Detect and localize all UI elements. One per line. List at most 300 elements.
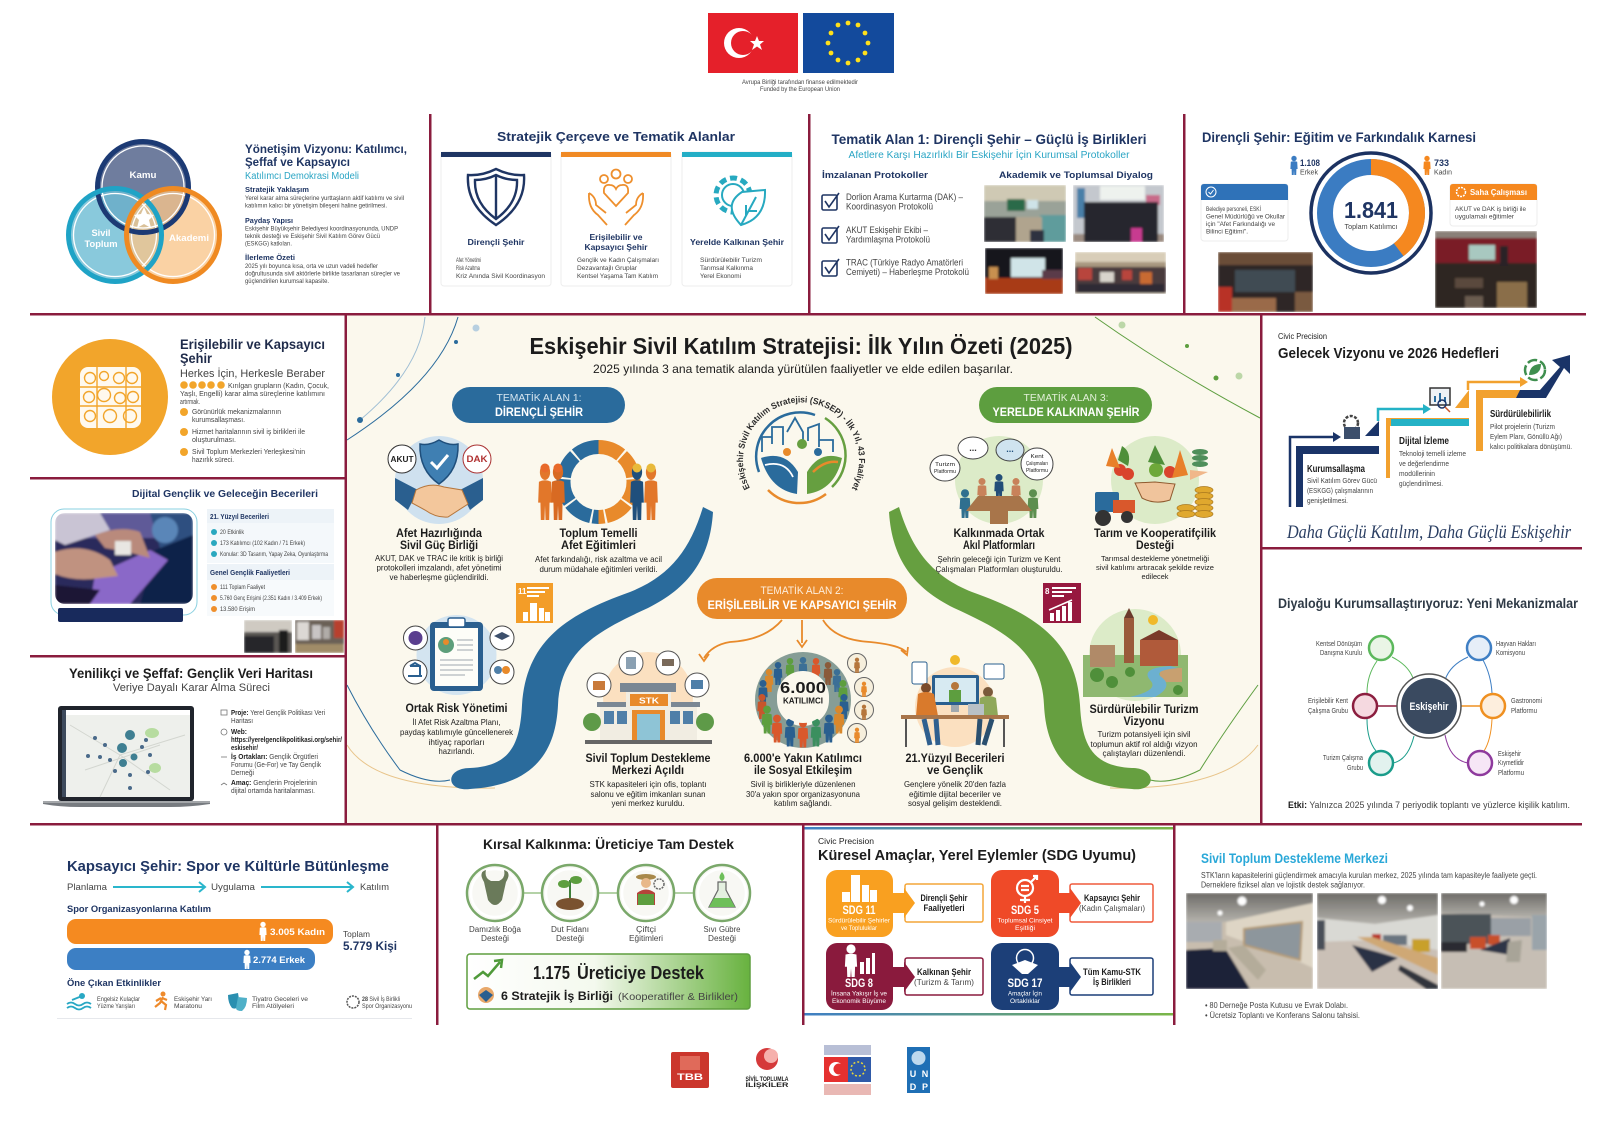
SDG 5 row [991, 870, 1153, 937]
governance text: (ESKGG) katkıları. [245, 240, 292, 248]
venn diagram: Sivil [92, 228, 110, 239]
pill: theme 2: ERİŞİLEBİLİR VE KAPSAYICI ŞEHİR [708, 597, 897, 612]
icon: gear and leaf [716, 178, 765, 225]
icon: STK building: STK [639, 696, 660, 706]
step texts: Sivil Katılım Görev Gücü [1307, 476, 1377, 485]
thematic subtitle: Afetlere Karşı Hazırlıklı Bir Eskişehir İçin Kurumsal Protokoller [848, 148, 1130, 161]
item: sustainable tourism: çalıştayları düzenlendi. [1102, 748, 1186, 758]
arrow band: green [889, 507, 1151, 789]
support circles: Dut Fidanı [551, 925, 589, 934]
governance text: doğrultusunda sivil aktörlerle birlikte tasarlanan süreçler ve [245, 270, 401, 278]
panel: youth data map [43, 666, 342, 807]
female stat [1423, 156, 1452, 176]
male stat: 1.108 [1300, 158, 1320, 168]
icon: partnership [478, 987, 494, 1003]
pill: theme 3 [979, 387, 1152, 423]
icon: gear building [1344, 416, 1360, 439]
hub labels: Grubu [1347, 763, 1363, 772]
governance heading [245, 142, 407, 182]
accessible text: Hizmet haritalarının sivil iş birlikleri ile [192, 429, 305, 436]
step texts: modüllerinin [1399, 469, 1435, 478]
hub labels: Kentsel Dönüşüm [1316, 639, 1362, 648]
producer support box: 1.175 [533, 963, 570, 983]
blue card: için "Afet Farkındalığı ve [1206, 221, 1275, 228]
card: accessible city [561, 152, 671, 286]
item: social engagement: Sivil iş birlikleriyle düzenlenen [750, 779, 856, 789]
highlights: Spor Organizasyonu [362, 1003, 412, 1010]
hub labels: Hayvan Hakları [1496, 639, 1536, 648]
item: disaster alliance: protokolleri imzalandı, afet yönetimi [376, 562, 502, 572]
thematic heading: Tematik Alan 1: Dirençli Şehir – Güçlü İş Birlikleri [832, 131, 1146, 147]
protocol list: AKUT Eskişehir Ekibi – [846, 225, 928, 235]
blue card: Bilinci Eğitimi". [1206, 228, 1248, 236]
item: disaster alliance: ve haberleşme güçlendirildi. [390, 572, 488, 582]
skills table: 111 Toplam Faaliyet [220, 585, 265, 591]
map text: Forumu (Ge-For) ve Tay Gençlik [231, 762, 321, 769]
pill: theme 3: YERELDE KALKINAN ŞEHİR [992, 406, 1140, 419]
support circles: Desteği [556, 934, 584, 943]
step texts: Pilot projelerin (Turizm [1490, 422, 1555, 431]
total stat [343, 929, 397, 953]
highlights heading: Öne Çıkan Etkinlikler [67, 978, 162, 988]
centre heading: Sivil Toplum Destekleme Merkezi [1201, 850, 1388, 866]
male stat: Erkek [1300, 170, 1318, 176]
blue card: Belediye personeli, ESKİ [1206, 204, 1261, 213]
panel: SDG alignment [804, 827, 1173, 1016]
photo: mailbox room [1186, 893, 1313, 989]
item: 21st century skills: eğitimle dijital beceriler ve [909, 789, 1001, 799]
funding note: Avrupa Birliği tarafından finanse edilmektedir [742, 80, 858, 86]
support circles: Desteği [481, 934, 509, 943]
icon: meeting table: Platformu [1026, 468, 1048, 474]
card: local development: Yerelde Kalkınan Şehir [690, 237, 785, 247]
orange card: AKUT ve DAK iş birliği ile [1455, 206, 1526, 213]
step texts: Dijital İzleme [1399, 434, 1449, 447]
item: social engagement: ile Sosyal Etkileşim [754, 763, 852, 777]
item: social engagement [744, 654, 874, 808]
item: support centre: yeni merkez kuruldu. [612, 798, 684, 808]
accessible text: artırmak. [180, 399, 200, 406]
governance text: Paydaş Yapısı [245, 216, 293, 225]
bar chart [67, 919, 333, 970]
step texts: ve değerlendirme [1399, 459, 1449, 468]
producer support box: Üreticiye Destek [577, 963, 705, 983]
logo: TBB [671, 1052, 709, 1088]
support circles: Sıvı Gübre [704, 925, 741, 934]
icon: flask [709, 872, 735, 907]
icon: community circle [52, 339, 168, 455]
icon: STK building [583, 651, 714, 744]
item: social engagement: katılım sağlandı. [774, 798, 832, 808]
support circles [467, 865, 750, 943]
total stat: 5.779 Kişi [343, 939, 397, 953]
Turkish flag [708, 13, 798, 73]
SDG 8 row [826, 943, 983, 1010]
hub labels: Platformu [1498, 768, 1524, 777]
card: accessible city: Kentsel Yaşama Tam Katılım [577, 273, 658, 280]
card: local development: Sürdürülebilir Turizm [700, 257, 762, 264]
icon: seedling [556, 876, 584, 910]
support circles: Eğitimleri [629, 934, 663, 943]
donut chart: Toplam Katılımcı [1344, 222, 1398, 231]
icon: shield [468, 169, 524, 225]
protocols heading: İmzalanan Protokoller [822, 170, 928, 181]
pill: theme 1: TEMATİK ALAN 1: [496, 391, 582, 404]
panel: thematic area 1 [822, 131, 1166, 294]
dialogue heading: Akademik ve Toplumsal Diyalog [999, 170, 1153, 181]
icon: handshake shield [388, 436, 491, 524]
staircase graphic [1290, 355, 1570, 507]
governance text: Eskişehir Büyükşehir Belediyesi koordinasyonunda, UNDP [245, 226, 398, 232]
SDG label: Civic Precision [818, 837, 874, 846]
logo: UNDP: U [910, 1069, 916, 1079]
item: 21st century skills: sosyal gelişim desteklendi. [908, 798, 1002, 808]
frame and navy bar [51, 509, 197, 622]
SDG 11 row: ve Topluluklar [841, 925, 878, 932]
bar chart: 3.005 Kadın [270, 927, 325, 938]
laptop with map [43, 706, 210, 807]
highlights: Eskişehir Yarı [174, 996, 212, 1003]
arrow band: blue [451, 507, 713, 789]
item: social engagement: 30'a yakın spor organizasyonuna [746, 789, 860, 799]
card: local development: Yerel Ekonomi [700, 273, 741, 280]
step texts: Sürdürülebilirlik [1490, 409, 1551, 420]
orange card [1450, 184, 1537, 226]
main title: Eskişehir Sivil Katılım Stratejisi: İlk Yılın Özeti (2025) [530, 333, 1072, 359]
item: community training [535, 447, 662, 574]
item: disaster alliance: Sivil Güç Birliği [400, 538, 478, 552]
centre bullets [1205, 1001, 1360, 1020]
total stat: Toplam [343, 929, 370, 939]
centre bullets: • 80 Derneğe Posta Kutusu ve Evrak Dolabı. [1205, 1001, 1348, 1010]
accessible heading: Erişilebilir ve Kapsayıcı [180, 337, 325, 352]
photo: auditorium [1218, 252, 1313, 312]
map heading: Yenilikçi ve Şeffaf: Gençlik Veri Haritası [69, 666, 313, 681]
producer support box: 6 Stratejik İş Birliği [501, 988, 613, 1003]
photo: stage [985, 248, 1063, 294]
step texts: kalıcı politikalara dönüşümü. [1490, 442, 1572, 451]
vision heading: Gelecek Vizyonu ve 2026 Hedefleri [1278, 345, 1499, 362]
accessible text: Kırılgan grupların (Kadın, Çocuk, [228, 383, 329, 390]
map text: eskisehir/ [231, 745, 258, 752]
map text: Derneği [231, 770, 254, 777]
pill: theme 2: TEMATİK ALAN 2: [760, 584, 844, 597]
orange card: Saha Çalışması [1470, 188, 1527, 197]
icon: meeting table: Turizm [935, 462, 955, 468]
item: 21st century skills: ve Gençlik [927, 763, 983, 777]
logo: Turkey EU [824, 1045, 871, 1095]
skills table: Konular: 3D Tasarım, Yapay Zeka, Oyunlaştırma [220, 552, 329, 558]
accessible text: Yaşlı, Engelli) karar alma süreçlerine katılımını [180, 391, 325, 398]
map text: Haritası [231, 718, 253, 725]
icon: handshake shield: DAK [466, 454, 488, 464]
icon: farm support [1095, 436, 1213, 526]
photo: workshop 1 [244, 620, 292, 653]
logo: civil society relations [746, 1048, 789, 1089]
icon: hands and heart [589, 170, 643, 225]
icon: meeting table: ... [969, 443, 977, 453]
SDG 8 badge: 8 [1045, 587, 1050, 596]
map text [221, 710, 342, 795]
bar chart: 2.774 Erkek [253, 955, 306, 966]
hub labels: Çalışma Grubu [1308, 706, 1348, 715]
item: joint risk management: İl Afet Risk Azaltma Planı, [412, 717, 500, 727]
skills table: 13.580 Erişim [220, 607, 255, 613]
SDG 11 row: SDG 11 [842, 903, 876, 917]
logo: UNDP: P [922, 1082, 928, 1092]
governance text: İlerleme Özeti [245, 253, 295, 262]
logo: civil society relations: SİVİL TOPLUMLA [746, 1076, 789, 1083]
highlights [57, 992, 412, 1019]
vision label: Civic Precision [1278, 332, 1327, 341]
item: 21st century skills: Gençlere yönelik 20'den fazla [904, 779, 1006, 789]
map text: Amaç: Gençlerin Projelerinin [231, 780, 317, 787]
donut chart [1311, 153, 1431, 273]
SDG 8 row: SDG 8 [845, 976, 873, 990]
step texts: Eylem Planı, Gönüllü Ağı) [1490, 432, 1562, 441]
item: common mind platforms: Akıl Platformları [963, 538, 1035, 552]
item: joint risk management: ihtiyaç raporları [428, 737, 484, 747]
blue card: Genel Müdürlüğü ve Okullar [1206, 214, 1286, 220]
item: agriculture: sivil katılımı artıracak şekilde revize [1096, 563, 1214, 572]
governance heading: Yönetişim Vizyonu: Katılımcı, [245, 142, 407, 156]
governance text: katılımın kalıcı bir yönetişim bileşeni haline getirilmesi. [245, 202, 387, 210]
governance text: 2025 yılı boyunca kısa, orta ve uzun vadeli hedefler [245, 263, 378, 270]
card: resilient city: Kriz Anında Sivil Koordinasyon [456, 273, 545, 280]
item: community training: durum müdahale eğitimleri verildi. [540, 564, 658, 574]
icon: meeting table [930, 436, 1053, 524]
photo: classroom [984, 185, 1066, 242]
map text: Proje: Yerel Gençlik Politikası Veri [231, 710, 325, 717]
decorative dots [357, 322, 1242, 423]
sport heading: Kapsayıcı Şehir: Spor ve Kültürle Bütünleşme [67, 858, 389, 875]
highlights: Maratonu [174, 1003, 202, 1010]
venn diagram: Kamu [130, 170, 157, 181]
panel: strategic framework [441, 129, 792, 286]
panel: future vision 2026 [1278, 332, 1572, 543]
item: community training: Afet Eğitimleri [561, 538, 636, 552]
protocol list: Yardımlaşma Protokolü [846, 234, 930, 244]
card: resilient city: Risk Azaltma [456, 265, 480, 272]
item: 21st century skills: 21.Yüzyıl Becerileri [906, 751, 1004, 765]
icon: city and river [1083, 608, 1188, 701]
item: community training: Toplum Temelli [560, 526, 638, 540]
photo: laptop hands [55, 513, 193, 604]
panel: digital youth [51, 488, 344, 653]
SDG 5 row: Eşitliği [1015, 925, 1035, 932]
panel: sport and culture [57, 858, 412, 1019]
map text: https://yerelgenclikpolitikasi.org/sehir/ [231, 737, 342, 744]
map subtitle: Veriye Dayalı Karar Alma Süreci [113, 682, 270, 694]
card: local development [682, 152, 792, 286]
panel: central strategy summary [347, 316, 1260, 808]
pill: theme 1: DİRENÇLİ ŞEHİR [495, 406, 584, 419]
card: resilient city: Dirençli Şehir [468, 237, 525, 247]
card: accessible city: Kapsayıcı Şehir [584, 242, 648, 252]
process arrows: Katılım [360, 882, 389, 893]
hub labels: Eskişehir [1498, 749, 1521, 758]
highlights: Tiyatro Geceleri ve [252, 996, 308, 1003]
highlights: Film Atölyeleri [252, 1003, 294, 1010]
icon: meeting table: Çalışmaları [1026, 461, 1048, 467]
photo: crowd [1075, 252, 1166, 294]
item: support centre [583, 651, 714, 808]
pill: theme 2 [697, 578, 907, 619]
hub labels: Erişilebilir Kent [1308, 696, 1348, 705]
icon: clipboard [403, 615, 514, 695]
item: agriculture: edilecek [1142, 572, 1169, 581]
step texts: güçlendirilmesi. [1399, 479, 1443, 488]
rural heading: Kırsal Kalkınma: Üreticiye Tam Destek [483, 837, 735, 852]
SDG 17 row: Ortaklıklar [1010, 998, 1041, 1005]
photo: workshop 2 [295, 620, 344, 653]
protocol list: Cemiyeti) – Haberleşme Protokolü [846, 267, 969, 277]
item: agriculture [1094, 436, 1216, 581]
item: sustainable tourism: Turizm potansiyeli için sivil [1098, 729, 1191, 739]
highlights: 28 Sivil İş Birlikli [362, 994, 400, 1003]
support circles: Damızlık Boğa [469, 925, 522, 934]
item: social engagement: 6.000'e Yakın Katılımcı [744, 751, 862, 765]
protocol list: Koordinasyon Protokolü [846, 202, 933, 212]
skills table: 5.760 Genç Erişimi (2.351 Kadın / 3.409 Erkek) [220, 596, 322, 602]
process arrows: Uygulama [211, 882, 256, 893]
SDG 8 badge [1043, 583, 1081, 623]
item: joint risk management: hazırlandı. [438, 746, 474, 756]
item: common mind platforms: Şehrin geleceği için Turizm ve Kent [938, 554, 1061, 564]
hub labels: Danışma Kurulu [1320, 648, 1362, 657]
EU flag [803, 13, 894, 73]
accessible text [180, 383, 329, 464]
item: support centre: salonu ve eğitim imkanları sunan [590, 789, 706, 799]
protocol list: TRAC (Türkiye Radyo Amatörleri [846, 258, 963, 268]
governance text: Stratejik Yaklaşım [245, 185, 309, 194]
icon: crowd ring: 6.000 [780, 680, 826, 697]
SDG 8 row: (Turizm & Tarım) [914, 977, 974, 987]
icon: meeting table: Kent [1030, 454, 1044, 460]
card: accessible city: Gençlik ve Kadın Çalışmaları [577, 257, 659, 264]
icon: crowd ring [757, 654, 874, 748]
accessible text: kurumsallaşması. [192, 417, 245, 424]
SDG 17 row: İş Birlikleri [1093, 977, 1131, 987]
skills table: 20 Etkinlik [220, 530, 245, 536]
SDG 17 row: Amaçlar İçin [1008, 988, 1042, 998]
icon: recycle leaf [1525, 360, 1545, 380]
support circles: Çiftçi [636, 925, 656, 934]
centre description: STK'ların kapasitelerini güçlendirmek amacıyla kurulan merkez, 2025 yılında tam kapasiteyle faaliyete geçti. [1201, 871, 1537, 880]
icon: chart magnifier [1430, 388, 1450, 412]
item: sustainable tourism [1083, 608, 1198, 758]
accessible bullet dots [180, 381, 225, 456]
SDG 11 row [826, 870, 983, 937]
SDG 5 row: (Kadın Çalışmaları) [1079, 903, 1145, 913]
donut chart: 1.841 [1344, 197, 1398, 223]
main subtitle: 2025 yılında 3 ana tematik alanda yürütülen faaliyetler ve elde edilen başarılar. [593, 362, 1013, 376]
arrows from theme 2 [699, 620, 908, 661]
item: agriculture: Tarım ve Kooperatifçilik [1094, 526, 1216, 540]
logo: TBB: TBB [677, 1072, 704, 1082]
accessible text: Görünürlük mekanizmalarının [192, 409, 281, 416]
SDG 17 row: SDG 17 [1008, 976, 1043, 990]
accessible heading: Şehir [180, 351, 213, 366]
hub labels: Platformu [1511, 706, 1537, 715]
card: local development: Tarımsal Kalkınma [700, 265, 753, 272]
digital heading: Dijital Gençlik ve Geleceğin Becerileri [132, 488, 318, 500]
governance text [245, 185, 404, 285]
SDG 17 row [991, 943, 1153, 1010]
skills table: 21. Yüzyıl Becerileri [210, 512, 269, 521]
step texts: (ESKGG) çalışmalarının [1307, 486, 1373, 495]
item: common mind platforms [930, 436, 1062, 574]
icon: farmer [636, 874, 664, 905]
SDG 5 row: SDG 5 [1011, 903, 1039, 917]
maroon dividers [30, 114, 1586, 1025]
SDG 11 badge [516, 583, 553, 623]
step texts: genişletilmesi. [1307, 496, 1348, 505]
item: sustainable tourism: Vizyonu [1124, 714, 1164, 728]
SDG 11 row: Faaliyetleri [924, 903, 964, 913]
item: 21st century skills [901, 655, 1009, 808]
centre description [1201, 871, 1537, 890]
icon: donut and workers [538, 447, 658, 520]
female stat: 733 [1434, 158, 1449, 168]
item: joint risk management: Ortak Risk Yönetimi [406, 701, 508, 715]
hub diagram: Eskişehir [1410, 701, 1449, 713]
process arrows: Planlama [67, 882, 108, 893]
orange card: uygulamalı eğitimler [1455, 214, 1515, 220]
item: support centre: Merkezi Açıldı [612, 763, 684, 777]
centre description: Derneklere fiziksel alan ve lojistik destek sağlanıyor. [1201, 880, 1365, 890]
male stat [1290, 156, 1320, 176]
panel: rural development [467, 837, 750, 1009]
SDG 8 row: Kalkınan Şehir [917, 967, 971, 977]
card: accessible city: Dezavantajlı Gruplar [577, 265, 638, 272]
step texts: Teknoloji temelli izleme [1399, 449, 1466, 458]
hub labels: Gastronomi [1511, 696, 1542, 705]
accessible text: oluşturulması. [192, 437, 236, 444]
accessible heading: Herkes İçin, Herkesle Beraber [180, 367, 325, 380]
highlights: Yüzme Yarışları [97, 1003, 135, 1010]
governance text: teknik desteği ve Eskişehir Sivil Katılım Görev Gücü [245, 233, 381, 240]
photo: meeting room [1317, 893, 1438, 989]
SDG 8 row: İnsana Yakışır İş ve [831, 988, 887, 998]
logo: UNDP: N [922, 1069, 928, 1079]
step texts [1307, 409, 1572, 505]
governance text: güçlendirilen kurumsal kapasite. [245, 278, 329, 285]
icon: bull [481, 870, 509, 905]
icon: crowd ring: KATILIMCI [783, 696, 823, 706]
card: resilient city: Afet Yönetimi [456, 257, 481, 264]
SDG 17 row: Tüm Kamu-STK [1083, 967, 1141, 977]
SDG 5 row: Toplumsal Cinsiyet [998, 918, 1053, 924]
item: disaster alliance [375, 436, 503, 582]
accessible heading [180, 337, 325, 380]
skills table [207, 509, 334, 616]
female stat: Kadın [1434, 170, 1452, 176]
producer support box [467, 954, 750, 1009]
item: disaster alliance: Afet Hazırlığında [396, 526, 482, 540]
item: agriculture: Desteği [1136, 538, 1174, 552]
item: support centre: STK kapasiteleri için ofis, toplantı [590, 779, 706, 789]
protocol list [822, 192, 969, 277]
venn diagram: Akademi [169, 233, 209, 244]
photo: presentation [1435, 231, 1537, 308]
panel: training scorecard [1201, 129, 1537, 312]
item: disaster alliance: AKUT, DAK ve TRAC ile kritik iş birliği [375, 553, 503, 563]
item: sustainable tourism: Sürdürülebilir Turizm [1090, 702, 1198, 716]
card: accessible city: Erişilebilir ve [590, 232, 643, 242]
map text: Web: [231, 729, 247, 736]
logo: UNDP: D [910, 1082, 917, 1092]
